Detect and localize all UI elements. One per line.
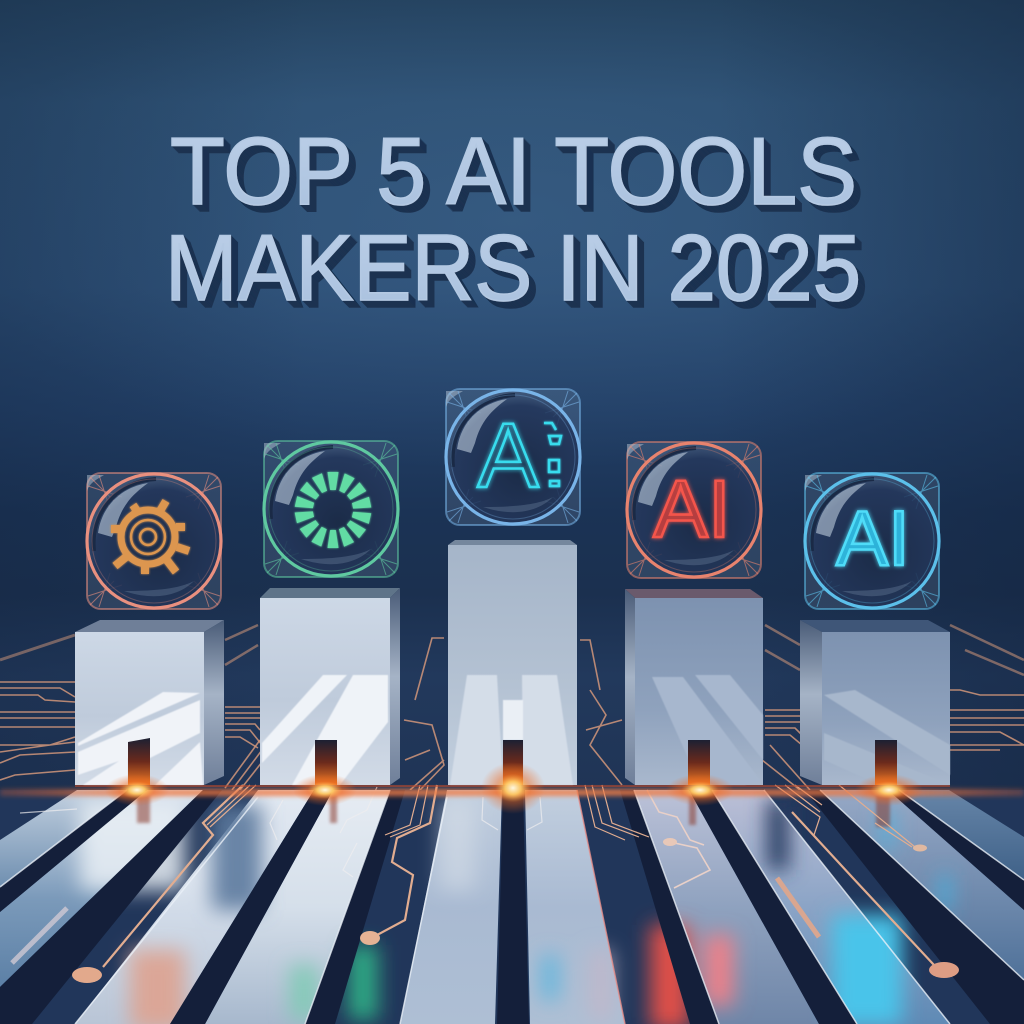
slot xyxy=(503,740,523,785)
lane edge highlights xyxy=(0,790,1024,1024)
reflection strips xyxy=(450,675,573,785)
lane patches xyxy=(80,800,950,1024)
block 4 xyxy=(625,589,763,785)
title line 2: MAKERS IN 2025 xyxy=(165,215,861,320)
title xyxy=(165,118,861,320)
letter A: A xyxy=(477,405,539,507)
slot xyxy=(875,740,897,785)
side glyphs xyxy=(544,423,561,486)
title line 1: TOP 5 AI TOOLS xyxy=(170,118,857,225)
icon 3: blue A xyxy=(445,389,581,525)
slot xyxy=(315,740,337,785)
slot xyxy=(128,738,150,785)
groove shadows xyxy=(0,790,1024,1024)
floor xyxy=(0,785,1024,1024)
icon 5: cyan AI xyxy=(804,473,940,609)
coloured lane reflections xyxy=(80,795,950,1024)
icon 4: red AI xyxy=(626,442,762,578)
background circuit traces xyxy=(0,625,1024,790)
block 3 xyxy=(448,540,577,785)
icon 2: green ring xyxy=(263,441,399,577)
dark floor base xyxy=(0,790,1024,1024)
reflection strips xyxy=(78,692,203,785)
reflection strips xyxy=(262,675,388,785)
block 2 xyxy=(260,588,400,785)
ring glyph xyxy=(295,472,371,548)
reflection strips xyxy=(652,675,763,785)
gear glyph xyxy=(111,501,189,574)
block 1 xyxy=(75,620,224,785)
slot xyxy=(688,740,710,785)
floor circuit traces xyxy=(12,785,959,983)
icon 1: orange gear xyxy=(86,473,222,609)
floor lanes xyxy=(0,790,1024,1024)
block 5 xyxy=(800,620,950,785)
AI label: AI xyxy=(653,464,731,555)
light streak and glow points xyxy=(0,762,1024,814)
reflection strips xyxy=(824,690,950,785)
slot reflections xyxy=(137,795,890,827)
AI label: AI xyxy=(836,494,910,582)
